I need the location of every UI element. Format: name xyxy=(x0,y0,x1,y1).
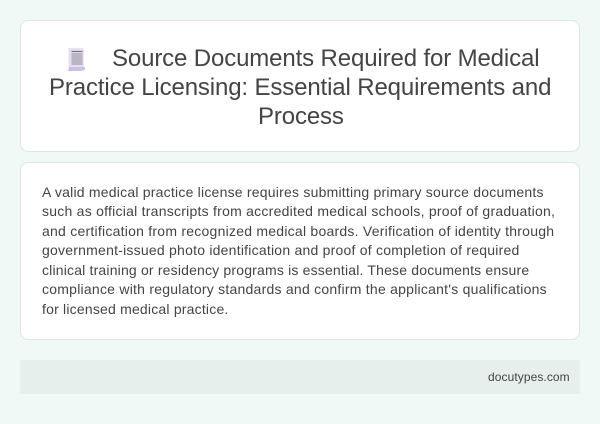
heading: Process xyxy=(258,103,344,130)
panel: description card xyxy=(20,162,580,340)
text block: description: clinical training or residency programs is essential. These documents ensure xyxy=(42,262,529,278)
text block: description: such as official transcripts from accredited medical schools, proof of graduation, xyxy=(42,203,555,219)
text block: description: A valid medical practice license requires submitting primary source documents xyxy=(42,184,544,200)
text block: description: government-issued photo identification and proof of completion of required xyxy=(42,242,520,258)
panel: title card xyxy=(20,20,580,152)
footer bar xyxy=(20,360,580,394)
text block: description: compliance with regulatory standards and confirm the applicant's qualifications xyxy=(42,281,547,297)
text block: description: for licensed medical practice. xyxy=(42,301,229,317)
footer text: docutypes.com xyxy=(488,370,570,384)
text block: description xyxy=(42,184,555,317)
heading xyxy=(49,45,551,130)
heading: Source Documents Required for Medical xyxy=(112,45,539,72)
text block: description: and certification from recognized medical boards. Verification of identity through xyxy=(42,223,554,239)
icon: document xyxy=(66,48,85,71)
heading: Practice Licensing: Essential Requirements and xyxy=(49,74,551,101)
